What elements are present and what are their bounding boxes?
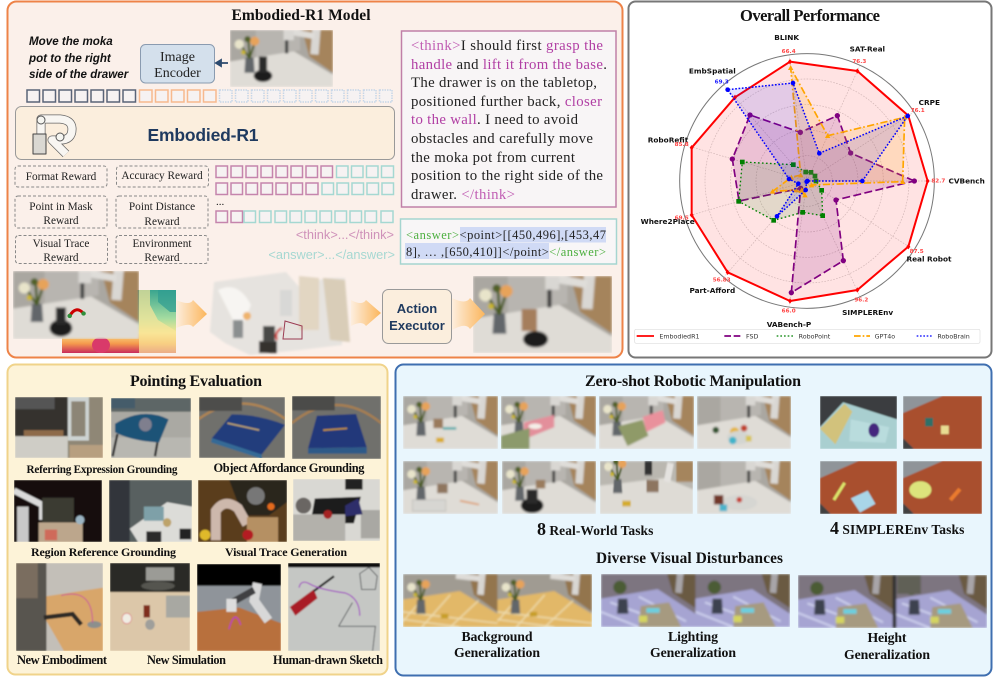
reward labels: Point in Mask	[29, 201, 93, 213]
radar chart	[635, 33, 985, 343]
task photo 8	[697, 461, 791, 514]
image encoder box	[140, 44, 214, 83]
legend: EmbodiedR1	[659, 333, 700, 340]
answer text box: <answer><point>[[450,496],[453,47	[406, 228, 606, 242]
photo: board with knife	[199, 397, 285, 458]
legend: GPT4o	[875, 333, 895, 340]
caption: Object Affordance Grounding	[214, 461, 365, 475]
value labels: 66.0	[782, 308, 796, 314]
caption: Region Reference Grounding	[31, 545, 176, 559]
caption: SIMPLEREnv tasks: 4 SIMPLEREnv Tasks	[830, 518, 964, 538]
task photo 1	[403, 396, 498, 449]
image encoder box: Image	[160, 50, 195, 65]
think text box: to the wall. I need to avoid	[411, 112, 579, 128]
output token squares	[216, 166, 394, 222]
caption: lighting: Lighting	[668, 629, 718, 644]
instruction text	[28, 35, 130, 81]
caption: Visual Trace Generation	[225, 545, 347, 559]
task photo 3	[599, 396, 694, 449]
legend: RoboBrain	[937, 333, 970, 340]
value labels: 56.83	[713, 277, 731, 283]
series: GPT4o	[773, 68, 905, 195]
reward labels: Reward	[43, 215, 79, 227]
photo: cabinet	[15, 397, 103, 458]
think text box: handle and lift it from the base.	[411, 57, 607, 73]
axis labels: CVBench	[948, 176, 985, 185]
think text box: the moka pot from current	[411, 150, 576, 166]
arrow 1	[176, 300, 207, 328]
axis labels: SAT-Real	[850, 44, 885, 53]
Embodied-R1 core block	[16, 106, 394, 160]
caption: Human-drawn Sketch	[273, 653, 383, 667]
sim photo: sink	[820, 396, 897, 449]
value labels: 85.8	[675, 142, 689, 148]
instruction text: Move the moka	[29, 35, 113, 48]
arrow: photo to encoder	[216, 60, 228, 66]
caption: Referring Expression Grounding	[26, 464, 178, 476]
axis labels: CRPE	[919, 98, 940, 107]
photo: human-drawn sketch	[288, 563, 380, 651]
think token label: <think>...</think>	[296, 227, 394, 242]
action executor box: Executor	[389, 318, 445, 333]
think text box: <think>I should first grasp the	[411, 38, 603, 54]
caption: lighting: Generalization	[650, 645, 736, 660]
caption: real-world tasks: 8 Real-World Tasks	[537, 519, 653, 539]
answer text box: 8], … ,[650,410]]</point></answer>	[406, 245, 606, 259]
reward labels: Point Distance	[129, 201, 195, 213]
heading: Embodied-R1 Model: Embodied-R1 Model	[232, 7, 371, 24]
axis labels: SIMPLEREnv	[842, 308, 893, 317]
caption: height: Generalization	[844, 647, 930, 662]
input token squares	[27, 90, 392, 102]
height generalization photos	[798, 575, 987, 628]
caption: background: Background	[462, 629, 533, 644]
think text box: The drawer is on the tabletop,	[411, 75, 597, 91]
background generalization photos	[403, 574, 592, 627]
value labels: 96.2	[854, 297, 868, 303]
reward labels: Reward	[144, 216, 180, 228]
value labels: 87.5	[910, 249, 924, 255]
arrow 3	[452, 298, 485, 330]
logo: robot R	[33, 116, 72, 154]
caption: lighting	[650, 629, 736, 660]
answer text box	[400, 219, 616, 264]
caption: New Embodiment	[17, 653, 108, 667]
value labels: 82.7	[931, 178, 945, 184]
photo: stove	[293, 479, 380, 541]
photo: chair	[111, 398, 191, 458]
answer token label: <answer>...</answer>	[268, 247, 395, 262]
caption: background: Generalization	[454, 645, 540, 660]
photo: arm over drawer	[198, 480, 287, 542]
value labels: 66.4	[782, 49, 796, 55]
value labels: 69.3	[715, 80, 729, 86]
value labels	[675, 49, 945, 314]
instruction text: side of the drawer	[29, 68, 130, 81]
photo: new embodiment	[16, 563, 103, 651]
reward labels	[26, 170, 203, 264]
reward labels: Reward	[43, 252, 79, 264]
task photo 6	[502, 461, 596, 514]
series: RoboPoint	[739, 162, 823, 220]
result photo	[473, 276, 612, 353]
sim photo: cubes on table	[903, 396, 982, 449]
think text box: position to the right side of the	[411, 168, 603, 184]
axis labels: EmbSpatial	[689, 67, 736, 76]
series: FSD	[732, 115, 914, 293]
task photo 2	[501, 396, 596, 449]
photo: new simulation	[110, 563, 190, 651]
panel: Pointing Evaluation	[8, 364, 388, 674]
ellipsis: ...	[216, 196, 224, 208]
photo: tabletop with toaster	[109, 480, 192, 542]
action executor box	[382, 290, 452, 344]
arrow 2	[351, 300, 381, 326]
axis labels: VABench-P	[767, 320, 812, 329]
panel: Zero-shot Robotic Manipulation	[396, 364, 992, 676]
value labels: 69.5	[675, 215, 689, 221]
think text box: obstacles and carefully move	[411, 131, 593, 147]
caption: height	[844, 630, 930, 662]
legend	[635, 329, 980, 343]
caption: height: Height	[868, 630, 907, 645]
image encoder box: Encoder	[154, 66, 201, 81]
reward labels: Accuracy Reward	[121, 170, 203, 182]
action executor box: Action	[397, 301, 437, 316]
axis labels: Real Robot	[906, 255, 952, 264]
lighting generalization photos	[601, 574, 790, 627]
task photo 5	[403, 461, 498, 514]
sim photo: plate and carrot	[903, 461, 982, 514]
photo: toy kitchen	[14, 480, 102, 542]
reward labels: Environment	[133, 238, 192, 250]
value labels: 76.3	[852, 59, 866, 65]
photo: simulated arm	[197, 564, 281, 651]
legend: FSD	[746, 333, 759, 340]
reward labels: Visual Trace	[33, 238, 89, 250]
task photo 4	[697, 396, 791, 449]
panel: Overall Performance	[628, 2, 992, 358]
reward labels: Format Reward	[26, 171, 97, 183]
wireframe box	[283, 321, 302, 339]
scene photo with trace	[13, 271, 139, 339]
photo: board with spoon	[292, 396, 381, 459]
value labels: 76.1	[911, 108, 925, 114]
heading: Diverse Visual Disturbances: Diverse Visual Disturbances	[596, 550, 783, 567]
heading: Overall Performance: Overall Performance	[740, 6, 880, 25]
sim photo: spoon and cloth	[820, 461, 897, 514]
instruction text: pot to the right	[28, 52, 112, 65]
think text box: drawer. </think>	[411, 187, 515, 203]
input photo	[230, 30, 333, 87]
task photo 7	[600, 461, 693, 514]
axis labels: BLINK	[774, 33, 799, 42]
axis labels	[641, 33, 985, 329]
Embodied-R1 core block: Embodied-R1	[148, 125, 259, 145]
series: RoboBrain	[728, 83, 908, 216]
depth map	[62, 290, 176, 353]
think text box	[402, 31, 616, 207]
axis labels: Where2Place	[641, 217, 695, 226]
axis labels: RoboRefit	[648, 136, 689, 145]
heading: Pointing Evaluation: Pointing Evaluation	[130, 373, 262, 390]
think text box: positioned further back, closer	[411, 94, 602, 110]
axis labels: Part-Afford	[689, 286, 735, 295]
legend: RoboPoint	[799, 333, 831, 340]
reward labels: Reward	[144, 252, 180, 264]
panel: Embodied-R1 Model	[8, 2, 622, 358]
reward boxes	[15, 166, 208, 264]
heading: Zero-shot Robotic Manipulation: Zero-shot Robotic Manipulation	[585, 373, 801, 390]
caption: New Simulation	[147, 653, 226, 667]
caption: background	[454, 629, 540, 660]
3D point cloud scene	[210, 272, 350, 355]
series: EmbodiedR1	[692, 62, 928, 301]
